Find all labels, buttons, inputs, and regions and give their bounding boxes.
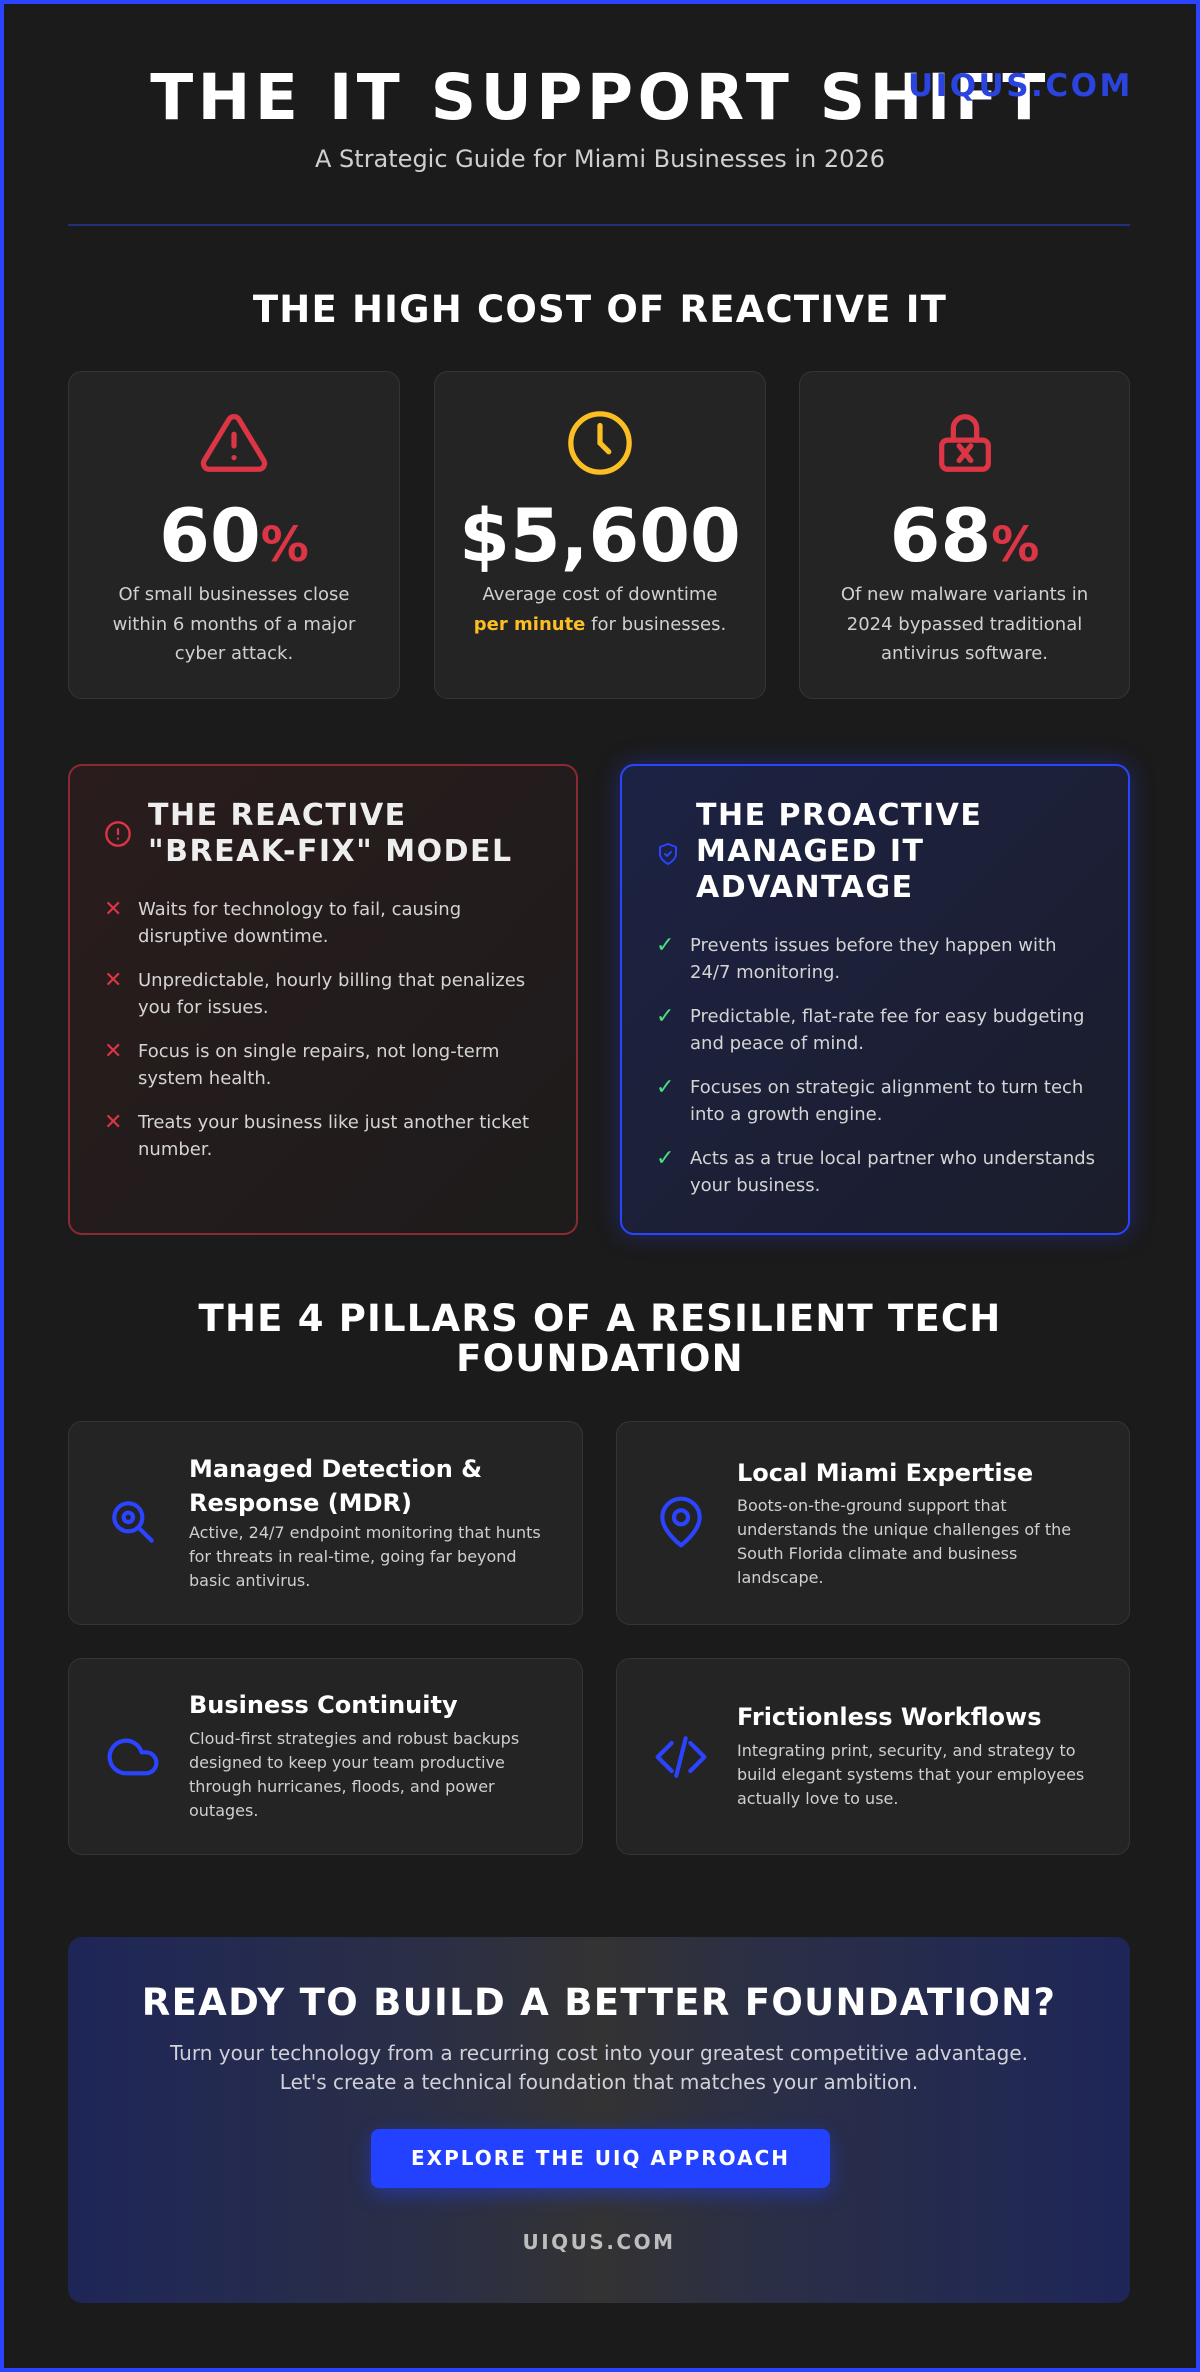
pillar: business continuity: Business Continuity — [189, 1691, 458, 1719]
list: benefits: Focuses on strategic alignment to turn tech into a growth engine. — [690, 1077, 1083, 1125]
section heading: 4 pillars: THE 4 PILLARS OF A RESILIENT TECH — [199, 1297, 1001, 1340]
brand logo text: UIQUS.COM — [908, 68, 1133, 104]
stat card: $5,600: $5,600 — [459, 494, 741, 579]
heading — [148, 798, 513, 869]
pillar: MDR: Active, 24/7 endpoint monitoring that hunts for threats in real-time, going far beyond basic antivirus. — [189, 1523, 541, 1590]
icon: search — [112, 1501, 154, 1543]
pillar: MDR — [68, 1421, 583, 1625]
icon: map pin — [660, 1496, 702, 1548]
list: drawbacks: ✕ — [104, 1110, 122, 1135]
pillar: local miami — [616, 1421, 1130, 1625]
stat card: 60%: Of small businesses close within 6 months of a major cyber attack. — [113, 584, 355, 664]
list: benefits: Acts as a true local partner who understands your business. — [690, 1148, 1095, 1196]
CTA button — [371, 2129, 830, 2188]
CTA heading: READY TO BUILD A BETTER FOUNDATION? — [142, 1981, 1056, 2024]
pillar: local miami: Local Miami Expertise — [737, 1459, 1033, 1487]
icon: clock — [568, 411, 632, 475]
icon: cloud — [108, 1738, 158, 1776]
list: drawbacks: ✕ — [104, 968, 122, 993]
pillar: frictionless workflows: Frictionless Workflows — [737, 1703, 1042, 1731]
list: benefits: Prevents issues before they happen with 24/7 monitoring. — [690, 935, 1056, 983]
panel: reactive break-fix — [68, 764, 578, 1235]
list: drawbacks: Focus is on single repairs, not long-term system health. — [138, 1041, 499, 1089]
title: THE IT SUPPORT SHIFT — [150, 61, 1050, 134]
stat card: 68%: 68% — [890, 494, 1039, 579]
section heading: 4 pillars: FOUNDATION — [456, 1337, 744, 1380]
icon: warning triangle — [200, 414, 268, 472]
subtitle: A Strategic Guide for Miami Businesses in 2026 — [315, 145, 885, 173]
stat card: 60%: 60% — [159, 494, 309, 579]
pillar: business continuity — [68, 1658, 583, 1855]
list: benefits: ✓ — [656, 1075, 674, 1100]
heading: THE PROACTIVE — [696, 798, 982, 833]
list: drawbacks: ✕ — [104, 897, 122, 922]
heading — [696, 798, 982, 905]
stat card: 68% — [799, 371, 1130, 699]
pillar: business continuity: Cloud-first strategies and robust backups designed to keep your team productive through hurricanes, floods, and power outages. — [189, 1729, 519, 1820]
panel: proactive managed IT — [620, 764, 1130, 1235]
CTA website: UIQUS.COM — [522, 2230, 676, 2254]
stat card: 68%: Of new malware variants in 2024 bypassed traditional antivirus software. — [841, 584, 1088, 664]
heading: MANAGED IT — [696, 834, 924, 869]
CTA text: Turn your technology from a recurring cost into your greatest competitive advantage. — [170, 2041, 1028, 2065]
CTA text: Let's create a technical foundation that matches your ambition. — [280, 2070, 918, 2094]
list: benefits — [656, 933, 1095, 1196]
pillar: frictionless workflows: Integrating print, security, and strategy to build elegant systems that your employees actually love to use. — [737, 1741, 1084, 1808]
stat card: $5,600 — [434, 371, 766, 699]
CTA panel — [68, 1937, 1130, 2303]
list: benefits: ✓ — [656, 1146, 674, 1171]
list: benefits: ✓ — [656, 1004, 674, 1029]
list: benefits: ✓ — [656, 933, 674, 958]
icon: broken lock — [939, 414, 991, 472]
list: drawbacks: Waits for technology to fail, causing disruptive downtime. — [138, 899, 461, 947]
heading: "BREAK-FIX" MODEL — [148, 834, 513, 869]
list: benefits: Predictable, flat-rate fee for easy budgeting and peace of mind. — [690, 1006, 1084, 1054]
list: drawbacks — [104, 897, 529, 1160]
section heading: 4 pillars — [198, 1297, 1001, 1380]
stat cards — [68, 371, 1130, 699]
list: drawbacks: Unpredictable, hourly billing that penalizes you for issues. — [138, 970, 525, 1018]
section heading: high cost: THE HIGH COST OF REACTIVE IT — [253, 288, 947, 331]
list: drawbacks: ✕ — [104, 1039, 122, 1064]
CTA button: EXPLORE THE UIQ APPROACH — [411, 2146, 790, 2170]
icon: shield — [659, 843, 677, 865]
CTA text — [170, 2041, 1028, 2094]
heading: THE REACTIVE — [148, 798, 407, 833]
icon: code — [656, 1736, 706, 1778]
pillar: local miami: Boots-on-the-ground support that understands the unique challenges of the South Florida climate and business landscape. — [737, 1496, 1071, 1587]
pillar: frictionless workflows — [616, 1658, 1130, 1855]
icon: alert circle — [105, 821, 131, 847]
stat card: $5,600: Average cost of downtime per minute for businesses. — [474, 584, 726, 634]
list: drawbacks: Treats your business like just another ticket number. — [138, 1112, 529, 1160]
stat card: 60% — [68, 371, 400, 699]
heading: ADVANTAGE — [696, 870, 914, 905]
pillar: MDR: Managed Detection & Response (MDR) — [189, 1455, 482, 1517]
